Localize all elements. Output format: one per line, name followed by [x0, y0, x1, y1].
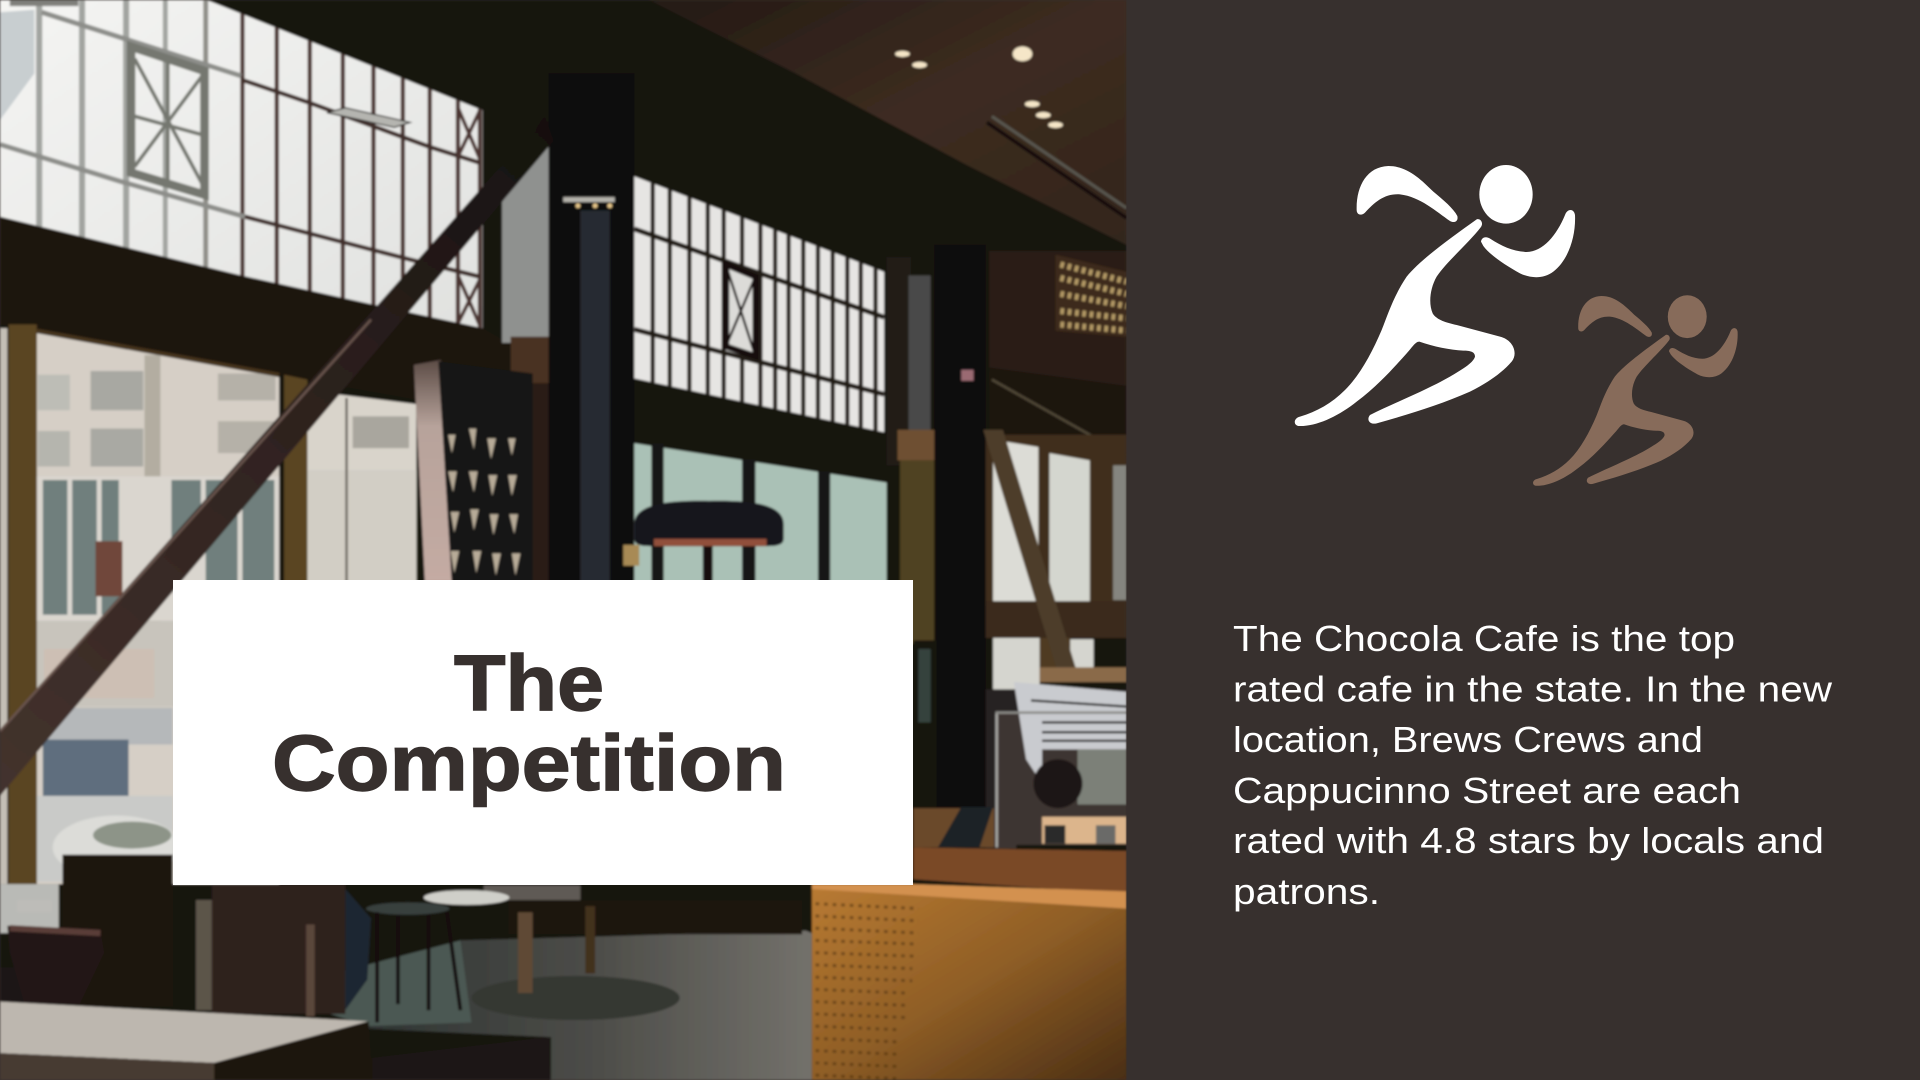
person [913, 640, 937, 808]
right ceiling beams [989, 368, 1125, 387]
floor [57, 882, 810, 941]
heater lamp [703, 539, 713, 588]
lower left window [37, 333, 279, 931]
central column [549, 73, 634, 588]
right panel background [1127, 0, 1920, 1080]
rolled fabric and lattice [414, 360, 452, 582]
title card [173, 580, 913, 885]
pastry case [986, 689, 1127, 849]
teal lower window [634, 443, 887, 588]
mid window diamond [726, 264, 756, 356]
body paragraph: rated with 4.8 stars by locals and [1233, 820, 1824, 861]
body paragraph: patrons. [1233, 871, 1380, 912]
foreground table [0, 1002, 369, 1063]
body paragraph: Cappucinno Street are each [1233, 770, 1741, 811]
body paragraph: location, Brews Crews and [1233, 719, 1703, 760]
wall lattice [1056, 255, 1127, 337]
diagonal beam [0, 116, 553, 796]
body paragraph: The Chocola Cafe is the top [1233, 618, 1735, 659]
diamond panel [131, 47, 204, 195]
title text: Competition [272, 718, 786, 807]
icon: brown runner [1533, 295, 1738, 486]
title text [272, 638, 786, 807]
upper left window [0, 0, 482, 328]
icon: white runner [1295, 165, 1575, 426]
hanging fixtures [10, 0, 410, 127]
middle window [634, 176, 884, 432]
title text: The [454, 638, 604, 727]
right windows [986, 435, 1127, 606]
cafe interior photograph [0, 0, 1127, 1080]
body paragraph: rated cafe in the state. In the new [1233, 668, 1833, 710]
pale column [502, 135, 549, 343]
dark band under window [6, 220, 480, 392]
furniture: chairs and tables [0, 855, 802, 1022]
right pillars [887, 257, 911, 465]
counter [913, 847, 1127, 894]
second lower window [307, 391, 416, 588]
ceiling [649, 0, 1127, 245]
body paragraph [1233, 618, 1833, 912]
